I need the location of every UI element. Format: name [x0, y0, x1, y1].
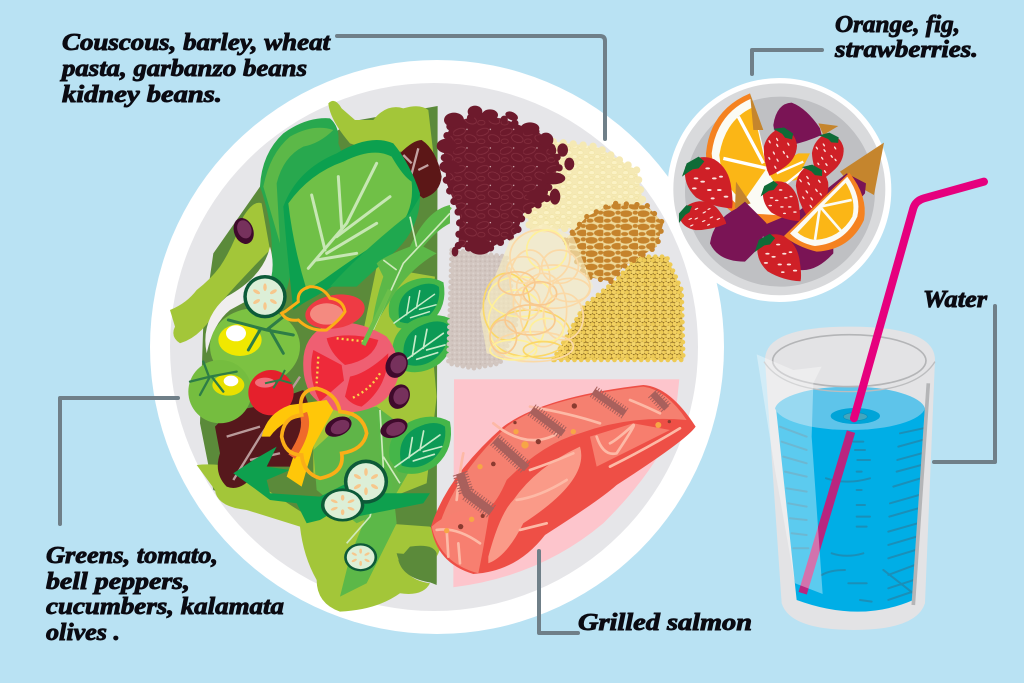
- pepper ring upper: [282, 287, 345, 330]
- garbanzo mound: [553, 257, 683, 360]
- gray grain: [448, 250, 517, 368]
- olives: [381, 348, 412, 382]
- connector: fruit: [752, 50, 822, 74]
- glass rim: [773, 335, 926, 387]
- grill marks: [460, 392, 667, 512]
- back lettuce leaf: [260, 118, 343, 290]
- green tomatoes: [210, 308, 300, 385]
- small tomato slice: [303, 290, 367, 333]
- label: fruit: strawberries.: [834, 37, 978, 63]
- pepper ring lower: [282, 388, 367, 478]
- kidney beans: [437, 106, 574, 257]
- brown peel: [750, 93, 763, 130]
- large tomato: [303, 323, 398, 412]
- pepper flecks: [444, 422, 661, 533]
- plate: [150, 60, 724, 634]
- arugula top: [363, 205, 450, 345]
- arugula lower: [340, 407, 397, 597]
- couscous: [527, 142, 643, 230]
- salmon section: [431, 379, 696, 587]
- orange half slice: [784, 173, 865, 252]
- stem over tomato: [363, 290, 390, 345]
- olive on lettuce: [230, 215, 257, 247]
- mid green foliage: [313, 407, 410, 523]
- dark red lettuce bottom: [215, 390, 317, 488]
- label: grains: Couscous, barley, wheat: [62, 30, 331, 56]
- connector: salmon: [539, 551, 578, 633]
- glass highlight: [757, 354, 823, 594]
- connector: water: [934, 306, 995, 462]
- straw above water: [854, 182, 984, 418]
- pink backing: [453, 379, 679, 587]
- fruit bowl: [667, 78, 891, 302]
- label: greens: olives .: [46, 620, 120, 646]
- label: grains: kidney beans.: [62, 82, 222, 108]
- salmon fillet: [431, 385, 696, 574]
- water ripple lines: [780, 427, 923, 602]
- main lettuce leaf: [283, 140, 420, 310]
- label: grains: pasta, garbanzo beans: [60, 56, 307, 82]
- onion: [205, 247, 273, 353]
- dark red lettuce top: [400, 140, 442, 198]
- straw under water: [803, 432, 851, 593]
- cucumbers: [243, 275, 287, 318]
- figs: [773, 103, 822, 145]
- strawberries: [682, 157, 733, 208]
- connector: grains: [337, 36, 605, 139]
- label: salmon: Grilled salmon: [578, 610, 752, 636]
- label: greens: bell peppers,: [46, 569, 190, 595]
- label: water: Water: [923, 287, 988, 313]
- label: greens: Greens, tomato,: [46, 543, 218, 569]
- label: fruit: Orange, fig,: [835, 12, 960, 38]
- red cherry tomato: [248, 370, 294, 415]
- pasta swirls: [480, 223, 593, 363]
- water column: [776, 396, 925, 612]
- spinach leaves: [389, 278, 444, 329]
- label: greens: cucumbers, kalamata: [46, 594, 284, 620]
- grains section: [437, 106, 683, 368]
- lime lettuce pieces: [170, 101, 440, 612]
- salad half of the plate: [170, 101, 454, 612]
- yellow pepper strips: [262, 400, 333, 487]
- glass of water: [757, 182, 984, 630]
- orange large slice: [706, 93, 810, 227]
- dark lettuce backing: [200, 106, 438, 585]
- glass body: [765, 327, 935, 630]
- connector: greens: [60, 398, 178, 524]
- barley: [565, 203, 663, 282]
